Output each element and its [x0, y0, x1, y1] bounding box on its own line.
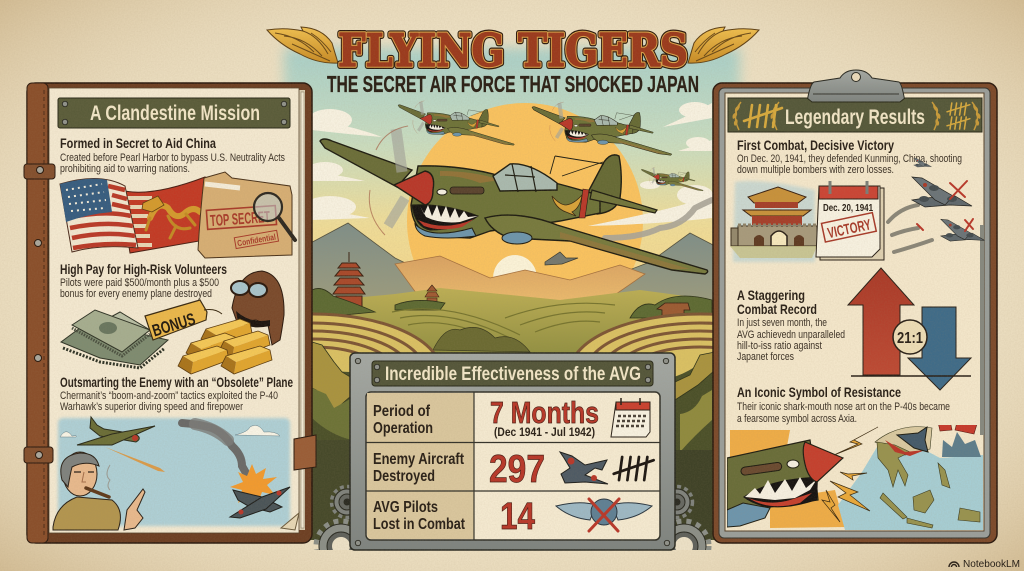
icon: victory calendar [816, 181, 884, 260]
icon: five tally marks [614, 457, 654, 480]
clouds [60, 425, 280, 437]
text block: combat record: hill-to-iss ratio against [737, 340, 822, 352]
text block: iconic symbol: Their iconic shark-mouth nose art on the P-40s became [737, 401, 950, 413]
text block: iconic symbol [737, 384, 950, 425]
small distant pagoda [425, 285, 439, 303]
heading plate: A Clandestine Mission [90, 102, 260, 125]
small house [657, 303, 690, 317]
icon: metal clip [807, 70, 905, 102]
icon: pilot helmet and goggles [231, 271, 284, 345]
icon: top secret folder and magnifier: TOP SECRET [210, 209, 271, 230]
small plane upper right [532, 102, 672, 155]
text block: combat record: Japanet forces [737, 351, 794, 363]
red flags and crowd [938, 425, 981, 457]
watermark: notebooklm: NotebookLM [963, 558, 1020, 570]
gears [314, 484, 712, 550]
icon: general chennault with cigar [53, 452, 145, 530]
text block: first combat: down multiple bombers with zero losses. [737, 164, 894, 176]
row: avg pilots lost: AVG Pilots [373, 499, 438, 516]
metal frame [350, 353, 675, 550]
distant plane far right [641, 167, 703, 191]
terraces [312, 312, 712, 376]
icon: gold bars [178, 319, 272, 374]
clipboard frame [713, 83, 997, 543]
panel: legendary results (right clipboard) [713, 70, 997, 543]
row: period of operation: (Dec 1941 - Jul 1942) [494, 427, 595, 439]
text block: iconic symbol: a fearsome symbol across Axia. [737, 413, 857, 425]
chart: 21 to 1 arrows [848, 268, 971, 390]
title outline: FLYING TIGERS [338, 24, 688, 77]
icon: attacking p-40 [77, 417, 155, 445]
tiny distant enemy plane [545, 252, 578, 265]
icon: right wing [688, 27, 759, 63]
row: enemy aircraft destroyed: 297 [489, 448, 545, 491]
icon: bonus tag: BONUS [150, 309, 198, 340]
pages [49, 88, 305, 533]
map landmasses [875, 427, 980, 528]
middle fields [392, 302, 615, 337]
heading plate [372, 361, 653, 386]
icon: burning japanese plane [230, 464, 290, 518]
text block: first combat: First Combat, Decisive Victory [737, 137, 894, 153]
row: period of operation: Operation [373, 420, 433, 437]
text block: formed in secret: prohibiting aid to warring nations. [60, 163, 190, 175]
heading plate: Legendary Results [785, 106, 925, 129]
text block: outsmarting: Outsmarting the Enemy with an “Obsolete” Plane [60, 374, 293, 390]
row: avg pilots lost: Lost in Combat [373, 516, 466, 533]
ground line [851, 375, 971, 377]
row: avg pilots lost: 14 [500, 496, 535, 538]
text block: first combat: On Dec. 20, 1941, they defended Kunming, China, shooting [737, 153, 962, 165]
row: avg pilots lost [373, 496, 652, 538]
central illustrated scene [278, 42, 746, 550]
icon: victory calendar: Dec. 20, 1941 [823, 203, 873, 214]
illustration: shark nose and map of asia [727, 418, 983, 530]
text block: combat record: A Staggering [737, 287, 805, 303]
panel: a clandestine mission (left binder) [24, 83, 316, 543]
icon: chinese flag with dragon [120, 177, 205, 253]
title with wings [267, 24, 759, 97]
icon: crossed out pilot wings [556, 499, 652, 531]
text block: formed in secret: Formed in Secret to Aid China [60, 135, 216, 151]
row: period of operation [373, 395, 650, 439]
panel: incredible effectiveness of the avg [350, 353, 675, 550]
folded page corner [281, 513, 299, 530]
lightning bolts [822, 427, 878, 522]
blue arrow down [908, 307, 971, 390]
title gold edge: FLYING TIGERS [338, 24, 688, 77]
main P-40 Warhawk fighter with shark mouth [320, 126, 708, 274]
spine and straps [24, 83, 55, 543]
icon: left wing [267, 27, 338, 63]
text block: first combat [737, 137, 962, 176]
shark on map [897, 427, 928, 452]
text block: high pay: High Pay for High-Risk Volunteers [60, 261, 227, 277]
text block: high pay [60, 261, 227, 300]
central dark trees [433, 327, 530, 352]
text block: outsmarting: Chermanit’s “boom-and-zoom” tactics exploited the P-40 [60, 390, 278, 402]
icon: downed bombers [888, 158, 985, 252]
small sun on the horizon [493, 255, 537, 278]
row: enemy aircraft destroyed: Enemy Aircraft [373, 451, 465, 468]
small plane upper left [398, 101, 514, 145]
smoke plume [182, 423, 250, 480]
icon: top secret folder and magnifier: Confidential [236, 232, 277, 248]
smoke trail [605, 200, 712, 238]
sea [838, 442, 983, 530]
title text: FLYING TIGERS [338, 24, 688, 77]
icon: victory calendar: VICTORY [826, 216, 873, 242]
icon: american flag [60, 178, 138, 252]
icon: stacks of dollars [61, 310, 168, 368]
icon: top secret folder and magnifier [198, 172, 295, 258]
foliage [312, 288, 712, 318]
sky panel [58, 418, 290, 526]
text block: iconic symbol: An Iconic Symbol of Resistance [737, 384, 901, 400]
text block: combat record: In just seven month, the [737, 317, 827, 329]
text block: outsmarting [60, 374, 293, 413]
side strap [294, 435, 316, 470]
pagoda [333, 252, 365, 310]
binder cover [27, 83, 312, 543]
mountains [312, 222, 414, 298]
row: enemy aircraft destroyed [373, 448, 654, 491]
plane nose with shark mouth [727, 440, 843, 527]
lower forest [310, 372, 350, 540]
text block: high pay: bonus for every enemy plane destroyed [60, 288, 212, 300]
illustration: dogfight and general [53, 417, 299, 530]
text block: combat record [737, 287, 845, 363]
icon: destroyed enemy plane [560, 452, 608, 484]
row: enemy aircraft destroyed: Destroyed [373, 468, 435, 485]
ratio badge: 21:1 [897, 330, 923, 347]
heading plate [728, 98, 982, 132]
heading plate: Incredible Effectiveness of the AVG [385, 364, 641, 385]
setting sun [407, 103, 643, 280]
text block: formed in secret: Created before Pearl Harbor to bypass U.S. Neutrality Acts [60, 152, 285, 164]
icon: kunming city gate [730, 181, 817, 262]
table [366, 392, 660, 540]
tracer bullet [105, 447, 165, 472]
text block: combat record: Combat Record [737, 301, 817, 317]
red arrow up [848, 268, 914, 375]
clouds [304, 102, 713, 226]
icon: calendar [611, 398, 650, 437]
sky [284, 48, 740, 368]
heading plate [58, 98, 290, 128]
text block: outsmarting: Warhawk’s superior diving speed and firepower [60, 401, 243, 413]
text block: high pay: Pilots were paid $500/month plus a $500 [60, 277, 219, 289]
subtitle: THE SECRET AIR FORCE THAT SHOCKED JAPAN [327, 71, 699, 97]
text block: combat record: AVG achievedn unparalleled [737, 329, 845, 341]
row: period of operation: Period of [373, 403, 431, 420]
text block: formed in secret [60, 135, 285, 175]
row: period of operation: 7 Months [490, 395, 599, 430]
